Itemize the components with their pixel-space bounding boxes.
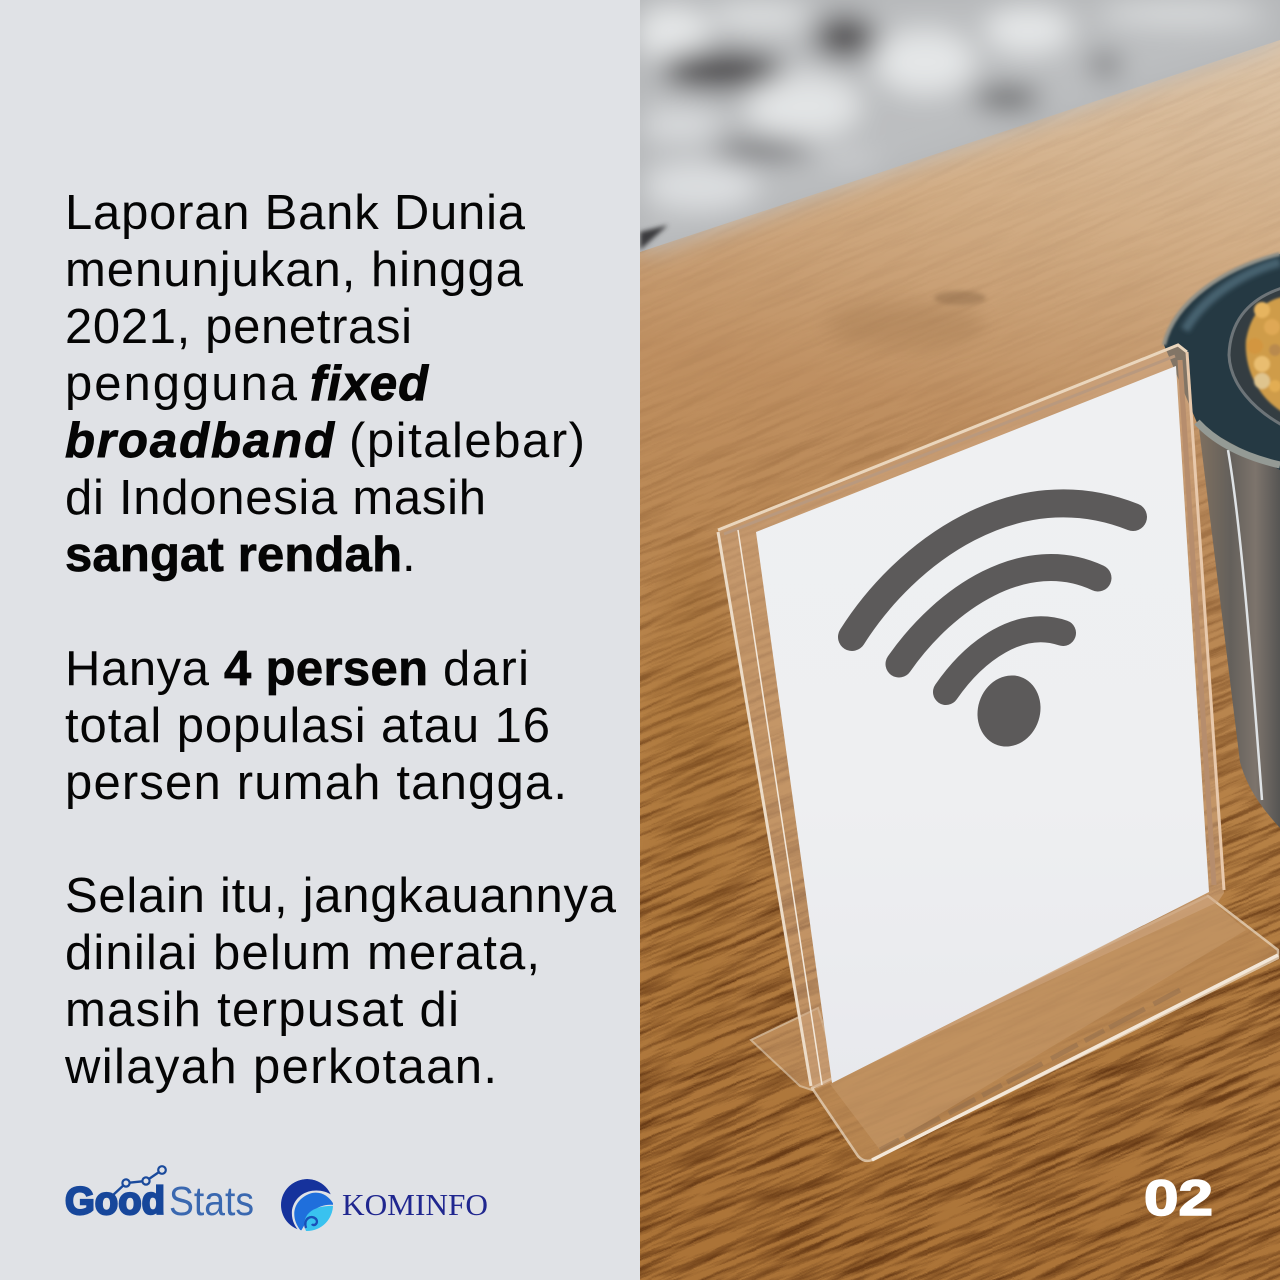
icon: wifi symbol bbox=[852, 503, 1133, 755]
paragraph 1: . bbox=[402, 528, 416, 582]
paragraph 1: (pitalebar) bbox=[349, 414, 585, 468]
photo: wifi sign on wooden table bbox=[634, 0, 1280, 1280]
paragraph 3: wilayah perkotaan. bbox=[64, 1040, 497, 1094]
paragraph 1: di Indonesia masih bbox=[65, 471, 486, 525]
paragraph 1: Laporan Bank Dunia bbox=[65, 186, 526, 240]
bowl dark interior bbox=[1164, 254, 1280, 470]
logo: Kominfo bbox=[280, 1179, 488, 1232]
left panel background bbox=[0, 0, 640, 1280]
logo: GoodStats: Stats bbox=[169, 1178, 254, 1224]
page number: 02 bbox=[1144, 1170, 1213, 1226]
paragraph 1: sangat rendah bbox=[65, 528, 402, 582]
paragraph 2: Hanya bbox=[65, 642, 210, 696]
paragraph 2: persen rumah tangga. bbox=[65, 756, 567, 810]
paragraph 3: dinilai belum merata, bbox=[65, 926, 540, 980]
inner cup bbox=[1229, 288, 1280, 425]
icon: Kominfo globe wave bbox=[280, 1179, 334, 1232]
paragraph 1: 2021, penetrasi bbox=[65, 300, 412, 354]
front foot bbox=[812, 896, 1278, 1161]
bucket rim bbox=[1197, 422, 1280, 465]
reflected text on base bbox=[880, 990, 1180, 1150]
acrylic sign stand bbox=[718, 345, 1278, 1161]
paragraph 1: menunjukan, hingga bbox=[65, 243, 524, 297]
logo: GoodStats: Good bbox=[65, 1180, 165, 1223]
paragraph 3: masih terpusat di bbox=[65, 983, 459, 1037]
acrylic front panel bbox=[718, 345, 1224, 1088]
white card bbox=[756, 366, 1209, 1083]
back foot bbox=[751, 1008, 838, 1090]
paragraph 3 bbox=[64, 869, 617, 1094]
paragraph 3: Selain itu, jangkauannya bbox=[65, 869, 617, 923]
paragraph 1: broadband bbox=[65, 414, 335, 468]
paragraph 1: fixed bbox=[310, 357, 429, 411]
paragraph 2: total populasi atau 16 bbox=[65, 699, 550, 753]
paragraph 1 bbox=[65, 186, 585, 582]
paragraph 2: 4 persen bbox=[224, 642, 428, 696]
chickpeas bbox=[1246, 297, 1280, 412]
logo: GoodStats bbox=[65, 1166, 254, 1224]
body text: World Bank report paragraphs bbox=[64, 186, 617, 1094]
bucket body bbox=[1198, 420, 1280, 828]
paragraph 1: pengguna bbox=[65, 357, 298, 411]
paragraph 2 bbox=[65, 642, 567, 810]
metal bucket with plant pot bbox=[1164, 254, 1280, 828]
paragraph 2: dari bbox=[443, 642, 529, 696]
wooden table bbox=[640, 0, 1280, 1280]
logo: Kominfo: KOMINFO bbox=[342, 1187, 488, 1222]
blurred checkered background bbox=[634, 0, 1280, 252]
